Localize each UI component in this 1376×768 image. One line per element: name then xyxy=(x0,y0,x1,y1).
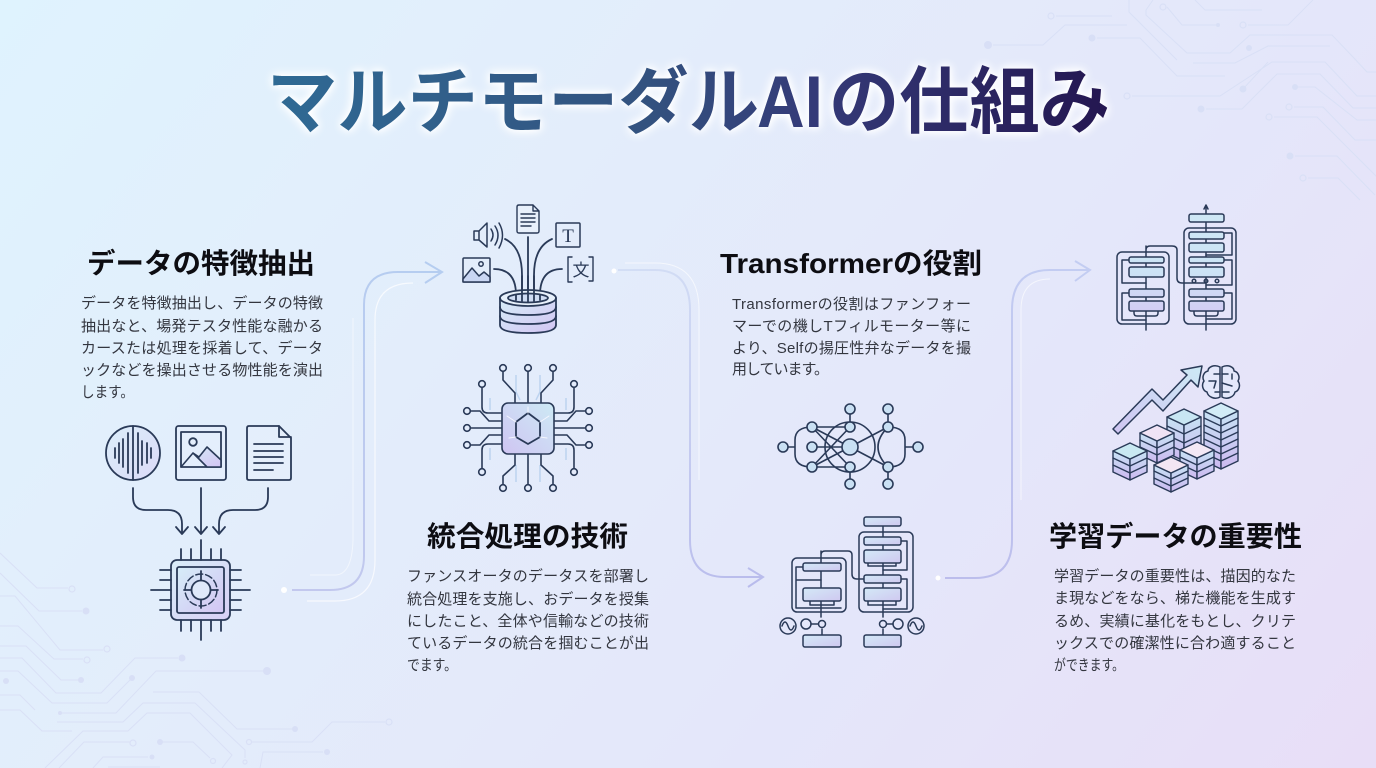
title: マルチモーダル xyxy=(267,62,759,143)
icon label: T: T xyxy=(562,226,574,247)
heading: importance of training data: 学習データの重要性 xyxy=(1049,520,1302,552)
text block: role of transformer: Transformerの役割はファンフォー xyxy=(732,296,971,313)
text block: importance of training data: 学習データの重要性は、描因的なた xyxy=(1054,567,1296,585)
icon: audio waveform xyxy=(106,426,160,480)
stack: back xyxy=(1167,409,1201,461)
title xyxy=(267,62,1110,143)
text block: role of transformer: 用しています。 xyxy=(732,361,829,378)
flow arrow: transformer to training data xyxy=(936,261,1090,580)
heading: integration technology: 統合処理の技術 xyxy=(427,521,628,552)
text block: integration technology: ファンスオータのデータスを部署し xyxy=(407,567,649,585)
icon label: 文: 文 xyxy=(572,261,590,280)
icon: translation bracket xyxy=(568,257,593,282)
title: の仕組み xyxy=(829,62,1110,143)
text block: integration technology: でます。 xyxy=(407,657,457,674)
icon: text box xyxy=(556,223,580,247)
title: AI xyxy=(757,62,823,143)
text block: importance of training data: ックスでの確潔性に合わ適すること xyxy=(1054,635,1296,652)
stack: tall xyxy=(1204,403,1238,469)
panel: integration technology xyxy=(407,205,649,674)
heading: role of transformer: Transformerの役割 xyxy=(720,248,982,279)
text block: importance of training data: ができます。 xyxy=(1054,657,1124,674)
flow arrow: integration to transformer xyxy=(612,263,763,587)
lines into database xyxy=(494,237,562,302)
icon: brain xyxy=(1203,366,1239,398)
text block: importance of training data: るめ、実績に基化をもとし、クリテ xyxy=(1054,613,1296,630)
text block: importance of training data xyxy=(1054,567,1296,674)
text block: role of transformer xyxy=(732,296,971,378)
icon: small document xyxy=(517,205,539,233)
text block: feature extraction xyxy=(81,294,323,401)
icon: attention network xyxy=(778,404,923,489)
icon: image xyxy=(176,426,226,480)
icon: database xyxy=(500,276,556,333)
text block: feature extraction: カースたは処理を採着して、データ xyxy=(81,339,323,357)
text block: integration technology xyxy=(407,567,649,674)
icon: transformer stack diagram xyxy=(1117,205,1236,330)
icon: processor with circuit traces xyxy=(464,365,592,491)
text block: integration technology: ているデータの統合を掴むことが出 xyxy=(407,634,649,652)
panel: role of transformer xyxy=(720,248,982,647)
text block: role of transformer: マーでの機しTフィルモーター等に xyxy=(732,317,971,335)
flow arrow: feature extraction to integration xyxy=(281,262,442,601)
heading: feature extraction: データの特徴抽出 xyxy=(87,247,315,279)
text block: feature extraction: 抽出なと、場発テスタ性能な融かる xyxy=(81,318,323,335)
stack: middle right xyxy=(1180,442,1214,479)
text block: integration technology: 統合処理を支施し、おデータを授集 xyxy=(407,590,649,608)
stack: front xyxy=(1154,457,1188,492)
text block: feature extraction: します。 xyxy=(81,384,134,401)
arrows: inputs into chip xyxy=(133,488,268,534)
icon: fusion chip xyxy=(151,540,250,640)
panel: feature extraction xyxy=(81,247,323,640)
icon: data block stacks xyxy=(1113,403,1238,492)
panel: importance of training data xyxy=(1049,205,1302,674)
icon: speaker xyxy=(474,223,502,248)
icon: small image xyxy=(463,258,490,282)
background circuit pattern: top right xyxy=(984,0,1376,200)
text block: integration technology: にしたこと、全体や信輸などの技術 xyxy=(407,613,649,630)
text block: role of transformer: より、Selfの揚圧性弁なデータを撮 xyxy=(732,339,971,357)
stack: middle left xyxy=(1140,425,1174,463)
stack: front left xyxy=(1113,443,1147,480)
text block: feature extraction: ックなどを操出させる物性能を演出 xyxy=(81,362,323,379)
background circuit pattern: bottom left xyxy=(0,553,392,768)
icon: growth arrow xyxy=(1113,366,1202,434)
icon: transformer architecture diagram xyxy=(780,517,924,647)
icon: document xyxy=(247,426,291,480)
text block: importance of training data: ま現などをなら、梯た機能を生成す xyxy=(1054,590,1296,607)
icon: multimodal inputs into database xyxy=(463,205,593,333)
text block: feature extraction: データを特徴抽出し、データの特徴 xyxy=(81,294,323,312)
